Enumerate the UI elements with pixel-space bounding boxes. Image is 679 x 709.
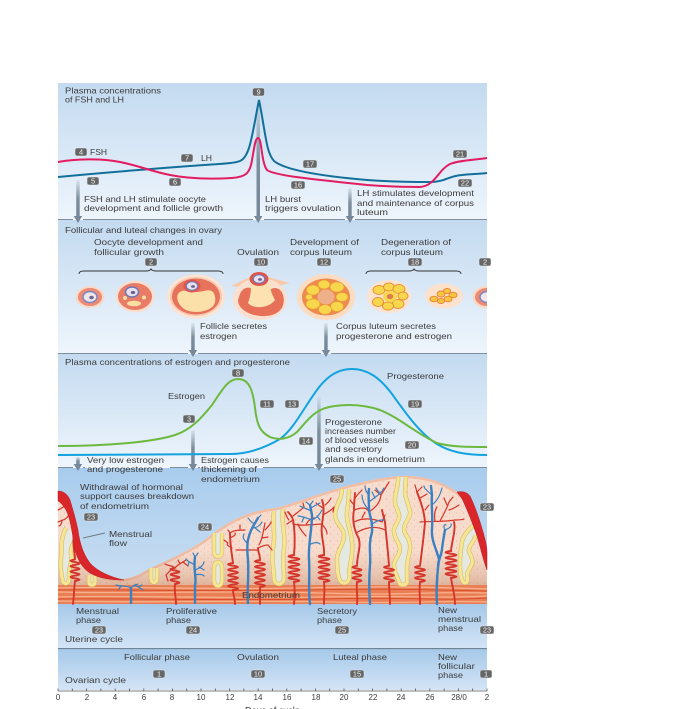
badge 13: [285, 400, 299, 409]
badge 3: [183, 415, 195, 424]
badge 12: [317, 258, 331, 267]
axis numbers: 4: [113, 693, 118, 702]
badge 8: 8: [236, 369, 240, 378]
curve: LH: [58, 100, 487, 182]
axis numbers: 28/0: [451, 693, 467, 702]
badge 2: 2: [149, 258, 153, 267]
text: progesterone increases blood vessels: Progesterone: [325, 418, 383, 427]
bracket: follicular growth: [79, 269, 223, 274]
axis numbers: 0: [56, 693, 61, 702]
badge 14: [299, 437, 313, 446]
menstrual phase: phase: [76, 616, 101, 625]
menstrual flow: right tissue band: [457, 492, 487, 570]
axis numbers: 20: [340, 693, 349, 702]
text: withdrawal of hormonal support: support causes breakdown: [80, 492, 195, 501]
badge 20: [405, 441, 419, 450]
text: FSH and LH stimulate: FSH and LH stimulate oocyte: [84, 195, 206, 204]
arrow: progesterone increases: [315, 397, 323, 471]
text: progesterone increases blood vessels: [325, 418, 425, 464]
label: LH: LH: [201, 154, 212, 163]
axis numbers: 18: [312, 693, 321, 702]
badge 2: [145, 258, 157, 267]
badge 12: 12: [320, 258, 328, 267]
text: LH burst: LH burst: [265, 195, 302, 204]
text: LH stimulates development: luteum: [357, 208, 388, 217]
badge 17: 17: [306, 160, 314, 169]
badge 21: 21: [456, 150, 464, 159]
proliferative phase: [166, 607, 218, 625]
arrow: corpus luteum secretes: [322, 323, 330, 357]
text: LH stimulates development: LH stimulates development: [357, 189, 475, 198]
arrow: FSH and LH stimulate: [74, 180, 82, 223]
axis numbers: 2: [85, 693, 90, 702]
text: very low estrogen and progesterone: and progesterone: [87, 465, 164, 474]
badge 10: 10: [257, 258, 265, 267]
menstrual phase: Menstrual: [76, 607, 119, 616]
new menstrual phase: menstrual: [438, 615, 481, 624]
time axis: [56, 688, 490, 709]
badge 10: 10: [254, 670, 262, 679]
new menstrual phase: [438, 606, 481, 633]
text: very low estrogen and progesterone: Very low estrogen: [87, 456, 165, 465]
curve: estrogen: [58, 379, 487, 447]
text: degeneration of corpus luteum: [381, 238, 452, 257]
new follicular phase: phase: [438, 671, 463, 680]
badge 10: [254, 258, 268, 267]
badge 23: [92, 626, 106, 635]
badge 25: [330, 475, 344, 484]
badge 7: 7: [185, 154, 189, 163]
heading: plasma FSH and LH: of FSH and LH: [65, 96, 124, 104]
badge 25: 25: [333, 475, 341, 484]
veins: [116, 486, 451, 604]
badge 23: 23: [95, 626, 103, 635]
menstrual flow: left tissue band: [58, 491, 124, 580]
text: corpus luteum secretes: [336, 322, 453, 341]
new follicular phase: New: [438, 653, 457, 662]
arrow: estrogen causes thickening: [189, 430, 197, 471]
text: progesterone increases blood vessels: glands in endometrium: [325, 455, 425, 464]
text: follicle secretes estrogen: Follicle secretes: [200, 322, 267, 331]
label: endometrium: Endometrium: [242, 591, 300, 600]
badge 21: [453, 150, 467, 159]
badge 23: 23: [87, 513, 95, 522]
badge 5: [87, 177, 99, 186]
text: LH burst: triggers ovulation: [265, 204, 342, 213]
text: estrogen causes thickening: thickening of: [201, 465, 258, 474]
label: estrogen: Estrogen: [168, 392, 205, 401]
icon: degenerating corpus luteum: [367, 280, 411, 313]
text: LH stimulates development: and maintenance of corpus: [357, 199, 474, 208]
coiled arteries: [58, 482, 464, 604]
heading: uterine cycle: Uterine cycle: [65, 635, 124, 644]
endometrial tissue: [58, 476, 487, 585]
badge 22: [458, 179, 472, 188]
curve: FSH: [58, 138, 487, 187]
badge 1 right: 1: [484, 670, 488, 679]
panel: estrogen and progesterone concentrations: [58, 354, 487, 484]
heading: ovary changes: Follicular and luteal changes in ovary: [65, 226, 223, 235]
panel: ovarian cycle: [58, 648, 492, 690]
badge 4: 4: [79, 148, 83, 157]
callout line: menstrual flow: [83, 533, 105, 538]
badge 3: 3: [187, 415, 191, 424]
badge 23 right: [480, 503, 494, 512]
menstrual phase: [76, 607, 119, 625]
panel: endometrium: [58, 468, 494, 605]
text: development of corpus luteum: [290, 238, 360, 257]
text: estrogen causes thickening: Estrogen causes: [201, 456, 269, 465]
icon: primary follicle: [76, 286, 104, 308]
badge 19: 19: [411, 400, 419, 409]
badge 7: [181, 154, 193, 163]
bracket: degeneration: [366, 269, 461, 274]
axis numbers: 24: [397, 693, 406, 702]
badge 22: 22: [461, 179, 469, 188]
badge 23 right: 23: [483, 626, 491, 635]
text: development of corpus luteum: Development of: [290, 238, 360, 247]
arrow: LH stimulates corpus luteum: [346, 188, 354, 223]
badge 19: [408, 400, 422, 409]
badge 18: [408, 258, 422, 267]
badge 25: 25: [338, 626, 346, 635]
heading: estrogen and progesterone: Plasma concentrations of estrogen and progesterone: [65, 358, 291, 367]
badge 24: 24: [189, 626, 197, 635]
text: development of corpus luteum: corpus luteum: [290, 248, 352, 257]
text: oocyte development: follicular growth: [94, 248, 165, 257]
badge 16: [291, 181, 305, 190]
text: degeneration of corpus luteum: Degeneration of: [381, 238, 452, 247]
badge 23: [84, 513, 98, 522]
arrow: LH burst: [254, 104, 262, 223]
text: LH burst: [265, 195, 342, 213]
badge 1: [153, 670, 165, 679]
panel: follicular and luteal changes in ovary: [58, 220, 502, 357]
text: degeneration of corpus luteum: corpus luteum: [381, 248, 443, 257]
panel: FSH and LH plasma concentrations: [58, 83, 487, 223]
badge 9: 9: [256, 88, 261, 97]
secretory phase: [317, 607, 358, 625]
badge 8: [232, 369, 244, 378]
badge 16: 16: [294, 181, 302, 190]
badge 15: [350, 670, 364, 679]
glands: [61, 477, 475, 586]
curve: progesterone: [58, 369, 487, 455]
badge 11: 11: [263, 400, 271, 409]
text: corpus luteum secretes: progesterone and estrogen: [336, 332, 453, 341]
new menstrual phase: New: [438, 606, 457, 615]
ovulation: Ovulation: [237, 653, 280, 662]
axis numbers: [56, 693, 490, 702]
badge 18: 18: [411, 258, 419, 267]
icon: corpus luteum: [297, 274, 355, 320]
axis numbers: 12: [226, 693, 235, 702]
axis numbers: 2: [485, 693, 490, 702]
badge 25: [335, 626, 349, 635]
luteal phase: Luteal phase: [333, 653, 388, 662]
heading: plasma FSH and LH: [65, 86, 161, 104]
secretory phase: Secretory: [317, 607, 358, 616]
badge 24: [198, 523, 212, 532]
icon: new follicle: [472, 286, 487, 308]
arrow: very low estrogen: [74, 457, 82, 471]
icon: growing follicle: [116, 280, 154, 312]
axis numbers: 16: [283, 693, 292, 702]
text: very low estrogen and progesterone: [87, 456, 165, 474]
badge 20: 20: [408, 441, 416, 450]
badge 10: [251, 670, 265, 679]
axis numbers: 8: [170, 693, 175, 702]
axis numbers: 26: [426, 693, 435, 702]
badge 9: [252, 88, 264, 97]
icon: mature follicle: [167, 274, 225, 318]
badge 24: [186, 626, 200, 635]
text: withdrawal of hormonal support: Withdrawal of hormonal: [80, 483, 183, 492]
text: follicle secretes estrogen: estrogen: [200, 332, 238, 341]
text: LH stimulates development: [357, 189, 475, 217]
badge 2 right edge: 2: [483, 258, 487, 267]
label: menstrual flow: [109, 530, 152, 548]
new follicular phase: follicular: [438, 662, 475, 671]
text: withdrawal of hormonal support: [80, 483, 195, 511]
proliferative phase: phase: [166, 616, 191, 625]
badge 4: [75, 148, 87, 157]
badge 15: 15: [353, 670, 361, 679]
text: follicle secretes estrogen: [200, 322, 267, 341]
new follicular phase: [438, 653, 475, 680]
badge 1: 1: [157, 670, 161, 679]
badge 24: 24: [201, 523, 209, 532]
text: corpus luteum secretes: Corpus luteum secretes: [336, 322, 436, 331]
axis numbers: 6: [142, 693, 147, 702]
text: FSH and LH stimulate: [84, 195, 224, 213]
panel: uterine cycle: [58, 604, 494, 648]
text: oocyte development: Oocyte development and: [94, 238, 204, 247]
badge 14: 14: [302, 437, 310, 446]
heading: plasma FSH and LH: Plasma concentrations: [65, 86, 161, 96]
badge 11: [260, 400, 274, 409]
axis numbers: 14: [254, 693, 263, 702]
icon: ovulation follicle: [231, 272, 290, 320]
text: FSH and LH stimulate: development and follicle growth: [84, 204, 224, 213]
text: progesterone increases blood vessels: increases number: [325, 427, 396, 436]
label: progesterone: Progesterone: [387, 372, 445, 381]
heading: ovarian cycle: Ovarian cycle: [65, 676, 127, 685]
text: withdrawal of hormonal support: of endometrium: [80, 502, 149, 511]
badge 23 right: [480, 626, 494, 635]
arrow: follicle secretes estrogen: [189, 323, 197, 357]
text: estrogen causes thickening: endometrium: [201, 475, 260, 484]
new menstrual phase: phase: [438, 624, 463, 633]
muscle layer: [58, 585, 487, 604]
badge 23 right: 23: [483, 503, 491, 512]
axis numbers: 10: [197, 693, 206, 702]
axis numbers: 22: [369, 693, 378, 702]
proliferative phase: Proliferative: [166, 607, 218, 616]
badge 6: 6: [173, 178, 177, 187]
text: ovulation: Ovulation: [237, 248, 280, 257]
label: menstrual flow: Menstrual: [109, 530, 152, 539]
text: oocyte development: [94, 238, 204, 257]
badge 6: [169, 178, 181, 187]
badge 5: 5: [91, 177, 95, 186]
follicular phase: Follicular phase: [124, 653, 191, 662]
text: progesterone increases blood vessels: of blood vessels: [325, 436, 389, 445]
badge 1 right: [480, 670, 492, 679]
label: menstrual flow: flow: [109, 539, 127, 548]
text: progesterone increases blood vessels: and secretory: [325, 445, 383, 454]
badge 2 right edge: [479, 258, 491, 267]
secretory phase: phase: [317, 616, 342, 625]
badge 13: 13: [288, 400, 296, 409]
badge 17: [303, 160, 317, 169]
label: FSH: FSH: [90, 148, 107, 157]
text: estrogen causes thickening: [201, 456, 269, 484]
icon: shrunken corpus luteum: [425, 284, 463, 308]
